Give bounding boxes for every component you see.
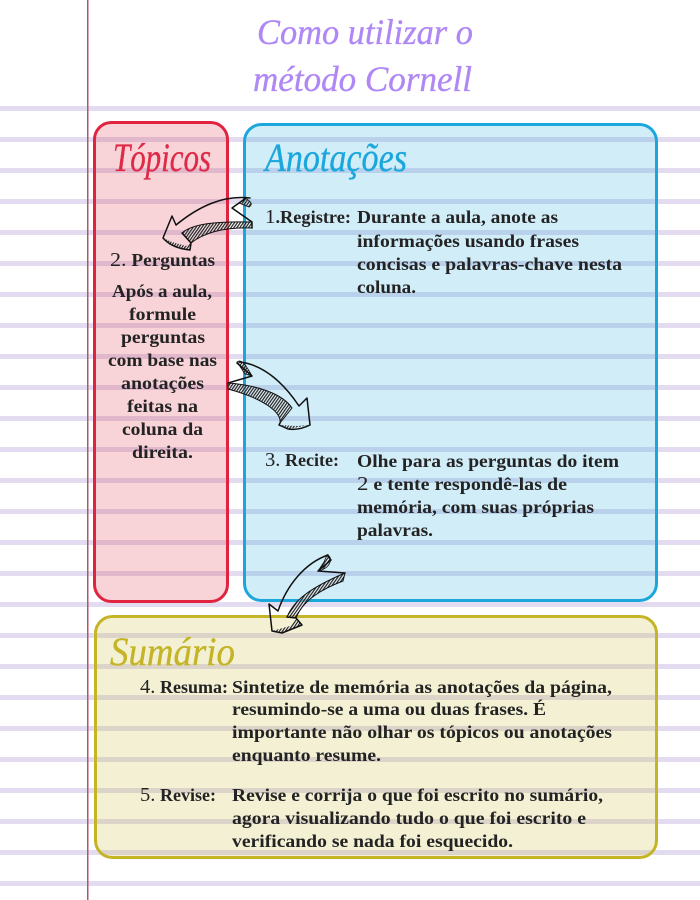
panel: sumário	[96, 616, 656, 858]
text: perguntas label: 2. Perguntas	[110, 249, 215, 271]
text: registre: informações usando frases	[357, 231, 579, 251]
text: recite	[265, 449, 619, 540]
text: perguntas body: com base nas	[108, 350, 217, 370]
text: recite: 3. Recite:	[265, 449, 339, 471]
text: registre: coluna.	[357, 277, 416, 297]
text: revise: 5. Revise:	[140, 784, 216, 806]
text: registre: Durante a aula, anote as	[357, 207, 558, 227]
text: registre: concisas e palavras-chave nesta	[357, 254, 622, 274]
text: recite: 2 e tente respondê-las de	[357, 473, 567, 495]
text: registre: 1.Registre:	[265, 206, 351, 228]
text: perguntas body: anotações	[121, 373, 204, 393]
panel: tópicos	[94, 122, 228, 602]
text: perguntas body: formule	[129, 304, 196, 324]
text: revise: Revise e corrija o que foi escrito no sumário,	[232, 785, 603, 805]
text: revise	[140, 784, 603, 851]
arrow: anotações to sumário	[269, 555, 345, 633]
text: revise: agora visualizando tudo o que foi escrito e	[232, 808, 586, 828]
text: resuma: 4. Resuma:	[140, 676, 228, 698]
title: Como utilizar o	[257, 12, 473, 52]
text: recite: Olhe para as perguntas do item	[357, 451, 619, 471]
text: resuma: resumindo-se a uma ou duas frases. É	[232, 699, 546, 719]
text: registre	[265, 206, 622, 297]
text: perguntas body: coluna da	[122, 419, 203, 439]
text: perguntas body: perguntas	[121, 327, 205, 347]
text: revise: verificando se nada foi esquecido.	[232, 831, 513, 851]
text: perguntas body: feitas na	[127, 396, 198, 416]
title	[253, 12, 473, 99]
text: perguntas body: Após a aula,	[112, 281, 212, 301]
text: resuma: importante não olhar os tópicos ou anotações	[232, 722, 612, 742]
text: resuma: enquanto resume.	[232, 745, 381, 765]
text: resuma: Sintetize de memória as anotações da página,	[232, 677, 612, 697]
text: perguntas body: direita.	[132, 442, 193, 462]
heading: anotações: Anotações	[262, 135, 407, 180]
text: resuma	[140, 676, 612, 765]
text: recite: palavras.	[357, 520, 433, 540]
heading: tópicos: Tópicos	[113, 135, 211, 180]
panel: anotações	[244, 124, 656, 600]
text: perguntas body	[108, 281, 217, 462]
title: método Cornell	[253, 59, 472, 99]
heading: sumário: Sumário	[110, 629, 235, 674]
text: recite: memória, com suas próprias	[357, 497, 594, 517]
arrow: tópicos to anotações	[228, 361, 310, 429]
arrow: anotações to tópicos	[163, 198, 252, 250]
